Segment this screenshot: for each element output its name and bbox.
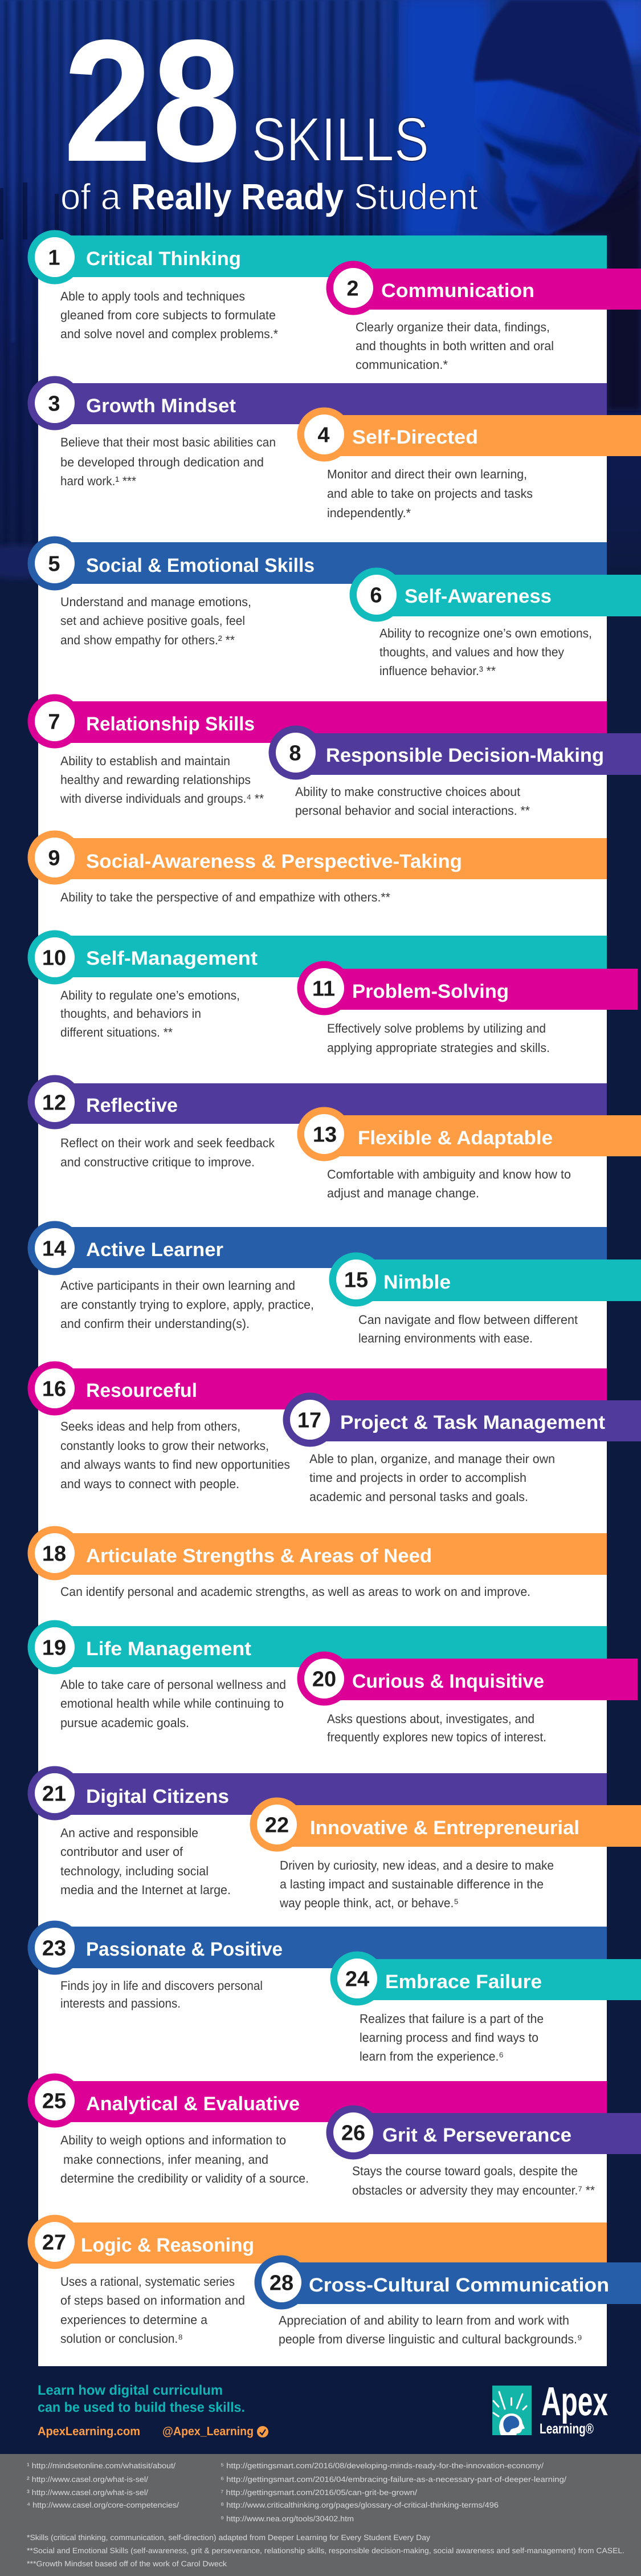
description 1: and solve novel and complex problems.* bbox=[60, 327, 278, 341]
description 16: and ways to connect with people. bbox=[60, 1477, 239, 1491]
description 6: thoughts, and values and how they bbox=[379, 645, 564, 659]
header 7: Relationship Skills bbox=[86, 713, 255, 735]
background photo: blue stage curtain bbox=[0, 0, 641, 579]
description 22 bbox=[279, 1858, 554, 1910]
description 6: influence behavior.³ ** bbox=[379, 664, 496, 678]
skill 13: Flexible & Adaptable bbox=[297, 1107, 641, 1200]
header 9: Social-Awareness & Perspective-Taking bbox=[86, 851, 462, 872]
description 12 bbox=[60, 1136, 275, 1169]
description 27: of steps based on information and bbox=[60, 2293, 245, 2307]
description 2: Clearly organize their data, findings, bbox=[356, 320, 550, 334]
header 5 bbox=[27, 536, 607, 591]
description 4 bbox=[327, 467, 533, 520]
header 14 bbox=[27, 1221, 607, 1275]
header 20: 20 bbox=[312, 1667, 336, 1691]
description 19: Able to take care of personal wellness and bbox=[60, 1677, 286, 1692]
header 28 bbox=[254, 2256, 641, 2309]
header 2: 2 bbox=[346, 277, 359, 301]
footnote sources column 1: ¹ http://mindsetonline.com/whatisit/about/ bbox=[27, 2461, 175, 2470]
description 28: Appreciation of and ability to learn from and work with bbox=[279, 2313, 569, 2327]
header 3: 3 bbox=[48, 392, 60, 416]
skill 23: Passionate & Positive bbox=[27, 1920, 607, 2010]
description 21 bbox=[60, 1826, 231, 1897]
description 27: solution or conclusion.⁸ bbox=[60, 2331, 183, 2346]
header 17 bbox=[283, 1392, 641, 1447]
header 19: 19 bbox=[42, 1636, 66, 1660]
background photo: student looking down bbox=[399, 0, 641, 411]
header 12 bbox=[27, 1075, 607, 1129]
description 3: hard work.¹ *** bbox=[60, 474, 136, 488]
description 21: media and the Internet at large. bbox=[60, 1883, 231, 1897]
header 11: Problem-Solving bbox=[352, 981, 509, 1002]
skill 3: Growth Mindset bbox=[27, 376, 607, 488]
description 14: Active participants in their own learning and bbox=[60, 1278, 295, 1293]
description 17: academic and personal tasks and goals. bbox=[309, 1489, 528, 1504]
description 25: Ability to weigh options and information to bbox=[60, 2133, 286, 2147]
description 10 bbox=[60, 988, 240, 1039]
description 14: and confirm their understanding(s). bbox=[60, 1317, 250, 1331]
header 27 bbox=[27, 2215, 607, 2269]
description 10: Ability to regulate one’s emotions, bbox=[60, 988, 240, 1002]
description 6 bbox=[379, 626, 592, 678]
title number 28: 28 bbox=[63, 3, 241, 198]
header 12: Reflective bbox=[86, 1095, 178, 1116]
description 26 bbox=[352, 2164, 595, 2197]
description 14: are constantly trying to explore, apply, practice, bbox=[60, 1298, 314, 1311]
skill 25: Analytical & Evaluative bbox=[27, 2073, 607, 2185]
header 11 bbox=[297, 961, 638, 1015]
skill 22: Innovative & Entrepreneurial bbox=[250, 1797, 641, 1910]
header 8: Responsible Decision-Making bbox=[326, 745, 604, 766]
header 15: 15 bbox=[344, 1268, 368, 1292]
skill 24: Embrace Failure bbox=[330, 1951, 641, 2063]
header 17: 17 bbox=[297, 1408, 321, 1432]
description 11: Effectively solve problems by utilizing and bbox=[327, 1021, 546, 1035]
call to action heading: can be used to build these skills. bbox=[38, 2400, 245, 2415]
header 9 bbox=[27, 830, 607, 885]
description 4: Monitor and direct their own learning, bbox=[327, 467, 527, 481]
attribution notes bbox=[27, 2533, 624, 2568]
header 13: 13 bbox=[313, 1123, 337, 1147]
description 22: way people think, act, or behave.⁵ bbox=[279, 1896, 459, 1910]
header 15: Nimble bbox=[383, 1271, 451, 1293]
header 23 bbox=[27, 1920, 607, 1975]
description 5: set and achieve positive goals, feel bbox=[60, 613, 245, 628]
header 27: 27 bbox=[42, 2230, 66, 2254]
description 1: Able to apply tools and techniques bbox=[60, 289, 245, 303]
icon: social badge bbox=[257, 2426, 268, 2437]
description 7: Ability to establish and maintain bbox=[60, 754, 230, 768]
header 25 bbox=[27, 2073, 607, 2128]
footnote sources column 2: ⁶ http://gettingsmart.com/2016/04/embracing-failure-as-a-necessary-part-of-deeper-learning/ bbox=[221, 2475, 566, 2484]
skill 26: Grit & Perseverance bbox=[326, 2105, 641, 2197]
header 18 bbox=[27, 1526, 607, 1580]
header 8 bbox=[269, 725, 641, 780]
header 28: Cross-Cultural Communication bbox=[309, 2274, 609, 2296]
header 21 bbox=[27, 1766, 607, 1820]
header 25: 25 bbox=[42, 2089, 66, 2113]
header 6 bbox=[350, 568, 641, 621]
skill 2: Communication bbox=[326, 261, 641, 372]
description 12: Reflect on their work and seek feedback bbox=[60, 1136, 275, 1150]
description 7 bbox=[60, 754, 264, 806]
header 28: 28 bbox=[270, 2272, 293, 2295]
description 19: emotional health while while continuing to bbox=[60, 1696, 284, 1710]
description 16 bbox=[60, 1419, 290, 1491]
description 26: obstacles or adversity they may encounter.⁷ ** bbox=[352, 2183, 595, 2197]
title word SKILLS: SKILLS bbox=[251, 105, 429, 174]
description 27 bbox=[60, 2274, 245, 2346]
description 24: learning process and find ways to bbox=[360, 2030, 538, 2045]
description 25: make connections, infer meaning, and bbox=[63, 2152, 268, 2167]
header 5: 5 bbox=[48, 552, 60, 576]
header 4: Self-Directed bbox=[352, 426, 478, 448]
header 26: 26 bbox=[341, 2121, 365, 2145]
description 24: learn from the experience.⁶ bbox=[360, 2049, 504, 2063]
icon: head with light rays bbox=[492, 2386, 532, 2435]
description 3: Believe that their most basic abilities can bbox=[60, 435, 276, 449]
description 20 bbox=[327, 1712, 546, 1744]
header 22: 22 bbox=[265, 1813, 289, 1837]
skill 27: Logic & Reasoning bbox=[27, 2215, 607, 2346]
header 4: 4 bbox=[317, 423, 330, 447]
header 11: 11 bbox=[312, 977, 335, 1001]
Apex Learning logo bbox=[492, 2379, 608, 2437]
skill 6: Self-Awareness bbox=[350, 568, 641, 678]
description 8 bbox=[295, 785, 530, 818]
description 28 bbox=[279, 2313, 582, 2346]
skill 20: Curious & Inquisitive bbox=[297, 1651, 638, 1744]
description 20: Asks questions about, investigates, and bbox=[327, 1712, 534, 1726]
subtitle: Student bbox=[354, 176, 478, 217]
skill 4: Self-Directed bbox=[297, 407, 641, 520]
description 5 bbox=[60, 595, 251, 647]
skill 19: Life Management bbox=[27, 1620, 607, 1730]
skill 5: Social & Emotional Skills bbox=[27, 536, 607, 647]
description 2: communication.* bbox=[356, 357, 448, 372]
header 10: Self-Management bbox=[86, 948, 258, 969]
footnote sources column 1: ³ http://www.casel.org/what-is-sel/ bbox=[27, 2488, 148, 2497]
header 19 bbox=[27, 1620, 607, 1674]
call to action heading: Learn how digital curriculum bbox=[38, 2383, 223, 2398]
description 13 bbox=[327, 1167, 571, 1200]
logo word Learning: Learning® bbox=[540, 2421, 594, 2437]
header 3 bbox=[27, 376, 607, 430]
description 27: experiences to determine a bbox=[60, 2313, 208, 2327]
footnote sources column 1: ⁴ http://www.casel.org/core-competencies/ bbox=[27, 2501, 179, 2509]
description 9: Ability to take the perspective of and empathize with others.** bbox=[60, 890, 390, 904]
header 1 bbox=[27, 230, 607, 284]
description 25: determine the credibility or validity of a source. bbox=[60, 2171, 309, 2185]
header 20 bbox=[297, 1651, 638, 1706]
footnote sources column 1 bbox=[27, 2461, 179, 2509]
description 19: pursue academic goals. bbox=[60, 1716, 189, 1730]
header 27: Logic & Reasoning bbox=[81, 2234, 254, 2256]
description 12: and constructive critique to improve. bbox=[60, 1155, 255, 1169]
skill 16: Resourceful bbox=[27, 1362, 607, 1491]
description 16: and always wants to find new opportunities bbox=[60, 1457, 290, 1472]
description 13: adjust and manage change. bbox=[327, 1186, 479, 1200]
skill 14: Active Learner bbox=[27, 1221, 607, 1331]
description 5: and show empathy for others.² ** bbox=[60, 633, 235, 647]
description 23: Finds joy in life and discovers personal bbox=[60, 1978, 263, 1993]
header 16: Resourceful bbox=[86, 1380, 197, 1401]
header 23: 23 bbox=[42, 1936, 66, 1960]
description 17: time and projects in order to accomplish bbox=[309, 1470, 526, 1485]
header 20: Curious & Inquisitive bbox=[352, 1671, 544, 1692]
description 21: An active and responsible bbox=[60, 1826, 198, 1840]
header 10: 10 bbox=[42, 946, 66, 970]
header 13 bbox=[297, 1107, 641, 1161]
skill 21: Digital Citizens bbox=[27, 1766, 607, 1897]
description 2: and thoughts in both written and oral bbox=[356, 339, 554, 353]
skill 11: Problem-Solving bbox=[297, 961, 638, 1055]
header 25: Analytical & Evaluative bbox=[86, 2093, 300, 2115]
header 18: 18 bbox=[42, 1542, 66, 1566]
header 16: 16 bbox=[42, 1378, 66, 1401]
description 18: Can identify personal and academic strengths, as well as areas to work on and improve. bbox=[60, 1584, 530, 1599]
description 22: Driven by curiosity, new ideas, and a desire to make bbox=[280, 1858, 554, 1872]
website link: ApexLearning.com bbox=[38, 2425, 140, 2438]
description 22: a lasting impact and sustainable difference in the bbox=[280, 1877, 544, 1891]
header 15 bbox=[329, 1252, 641, 1307]
attribution notes: ***Growth Mindset based off of the work of Carol Dweck bbox=[27, 2559, 227, 2568]
skill 17: Project & Task Management bbox=[283, 1392, 641, 1504]
attribution notes: **Social and Emotional Skills (self-awareness, grit & perseverance, relationship skills, responsible decision-making, social awareness and self-management) from CASEL. bbox=[27, 2546, 624, 2555]
header 12: 12 bbox=[42, 1091, 66, 1115]
header 2 bbox=[326, 261, 641, 315]
header 7: 7 bbox=[48, 710, 60, 734]
subtitle bbox=[60, 176, 478, 217]
description 11 bbox=[327, 1021, 550, 1055]
subtitle: Really Ready bbox=[131, 176, 344, 217]
description 21: contributor and user of bbox=[60, 1844, 183, 1859]
header 6: Self-Awareness bbox=[405, 586, 552, 607]
header 6: 6 bbox=[370, 584, 382, 608]
title bbox=[60, 3, 478, 217]
description 17: Able to plan, organize, and manage their own bbox=[309, 1452, 555, 1466]
description 6: Ability to recognize one’s own emotions, bbox=[379, 626, 592, 640]
footnote sources column 2: ⁵ http://gettingsmart.com/2016/08/developing-minds-ready-for-the-innovation-economy/ bbox=[221, 2461, 544, 2470]
description 24 bbox=[360, 2012, 544, 2063]
header 10 bbox=[27, 931, 607, 984]
description 13: Comfortable with ambiguity and know how to bbox=[327, 1167, 571, 1181]
header 1: 1 bbox=[48, 246, 60, 270]
footnote sources column 1: ² http://www.casel.org/what-is-sel/ bbox=[27, 2475, 148, 2484]
description 3: be developed through dedication and bbox=[60, 455, 264, 469]
header 17: Project & Task Management bbox=[340, 1412, 605, 1433]
description 1: gleaned from core subjects to formulate bbox=[60, 308, 276, 322]
header 3: Growth Mindset bbox=[86, 395, 236, 417]
skill 7: Relationship Skills bbox=[27, 694, 607, 806]
skill 9: Social-Awareness & Perspective-Taking bbox=[27, 830, 607, 904]
skill 18: Articulate Strengths & Areas of Need bbox=[27, 1526, 607, 1599]
description 25 bbox=[60, 2133, 309, 2185]
footnote sources column 2 bbox=[221, 2461, 566, 2523]
description 4: independently.* bbox=[327, 506, 411, 520]
description 16: Seeks ideas and help from others, bbox=[60, 1419, 240, 1433]
header 1: Critical Thinking bbox=[86, 248, 241, 270]
header 21: Digital Citizens bbox=[86, 1786, 229, 1807]
header 22 bbox=[250, 1797, 641, 1852]
skill 12: Reflective bbox=[27, 1075, 607, 1169]
description 1 bbox=[60, 289, 278, 341]
header 9: 9 bbox=[48, 846, 60, 870]
white content panel bbox=[38, 235, 607, 2366]
description 16: constantly looks to grow their networks, bbox=[60, 1439, 269, 1453]
header 13: Flexible & Adaptable bbox=[358, 1127, 553, 1149]
header 24: 24 bbox=[345, 1967, 369, 1991]
description 23 bbox=[60, 1978, 263, 2010]
header 8: 8 bbox=[289, 741, 301, 765]
header 22: Innovative & Entrepreneurial bbox=[310, 1817, 579, 1839]
header 16 bbox=[27, 1362, 607, 1415]
description 15 bbox=[358, 1313, 578, 1346]
description 19 bbox=[60, 1677, 286, 1730]
attribution notes: *Skills (critical thinking, communication, self-direction) adapted from Deeper Learning for Every Student Every Day bbox=[27, 2533, 430, 2542]
header 14: Active Learner bbox=[86, 1239, 223, 1261]
description 28: people from diverse linguistic and cultural backgrounds.⁹ bbox=[279, 2332, 582, 2346]
footnote sources column 2: ⁹ http://www.nea.org/tools/30402.htm bbox=[221, 2514, 354, 2523]
description 7: with diverse individuals and groups.⁴ ** bbox=[60, 791, 264, 806]
description 11: applying appropriate strategies and skills. bbox=[327, 1041, 550, 1055]
description 24: Realizes that failure is a part of the bbox=[360, 2012, 544, 2026]
subtitle: of a bbox=[60, 176, 121, 217]
footnote sources column 2: ⁸ http://www.criticalthinking.org/pages/glossary-of-critical-thinking-terms/496 bbox=[221, 2501, 499, 2509]
description 8: Ability to make constructive choices about bbox=[295, 785, 520, 799]
description 20: frequently explores new topics of interest. bbox=[327, 1730, 546, 1744]
description 10: thoughts, and behaviors in bbox=[60, 1006, 201, 1021]
description 15: Can navigate and flow between different bbox=[358, 1313, 578, 1327]
skill 28: Cross-Cultural Communication bbox=[254, 2256, 641, 2346]
footnote sources column 2: ⁷ http://gettingsmart.com/2016/05/can-grit-be-grown/ bbox=[221, 2488, 417, 2497]
header 2: Communication bbox=[381, 280, 534, 302]
description 8: personal behavior and social interactions. ** bbox=[295, 803, 530, 818]
header 24: Embrace Failure bbox=[385, 1971, 542, 1993]
header 21: 21 bbox=[42, 1782, 66, 1806]
social handle: @Apex_Learning bbox=[162, 2425, 254, 2438]
header 26 bbox=[326, 2105, 641, 2160]
header 14: 14 bbox=[42, 1237, 66, 1261]
description 27: Uses a rational, systematic series bbox=[60, 2274, 235, 2289]
header 23: Passionate & Positive bbox=[86, 1939, 283, 1960]
description 15: learning environments with ease. bbox=[358, 1331, 533, 1346]
description 2 bbox=[356, 320, 554, 372]
header 5: Social & Emotional Skills bbox=[86, 555, 315, 576]
description 5: Understand and manage emotions, bbox=[60, 595, 251, 609]
description 21: technology, including social bbox=[60, 1864, 209, 1878]
header 18: Articulate Strengths & Areas of Need bbox=[86, 1545, 432, 1567]
skill 8: Responsible Decision-Making bbox=[269, 725, 641, 818]
description 3 bbox=[60, 435, 276, 488]
description 7: healthy and rewarding relationships bbox=[60, 773, 251, 787]
header 19: Life Management bbox=[86, 1638, 251, 1660]
header 24 bbox=[330, 1951, 641, 2006]
description 26: Stays the course toward goals, despite the bbox=[352, 2164, 578, 2178]
skill 15: Nimble bbox=[329, 1252, 641, 1346]
call to action heading bbox=[38, 2383, 245, 2415]
description 17 bbox=[309, 1452, 555, 1504]
skill 10: Self-Management bbox=[27, 931, 607, 1039]
header 7 bbox=[27, 694, 607, 748]
footer sources panel bbox=[0, 2454, 641, 2576]
call to action bbox=[38, 2383, 268, 2438]
header 4 bbox=[297, 407, 641, 462]
description 23: interests and passions. bbox=[60, 1996, 181, 2010]
skill 1: Critical Thinking bbox=[27, 230, 607, 341]
description 14 bbox=[60, 1278, 314, 1331]
header 26: Grit & Perseverance bbox=[382, 2124, 571, 2146]
logo word Apex: Apex bbox=[541, 2379, 608, 2424]
description 4: and able to take on projects and tasks bbox=[327, 486, 533, 501]
description 10: different situations. ** bbox=[60, 1025, 173, 1039]
